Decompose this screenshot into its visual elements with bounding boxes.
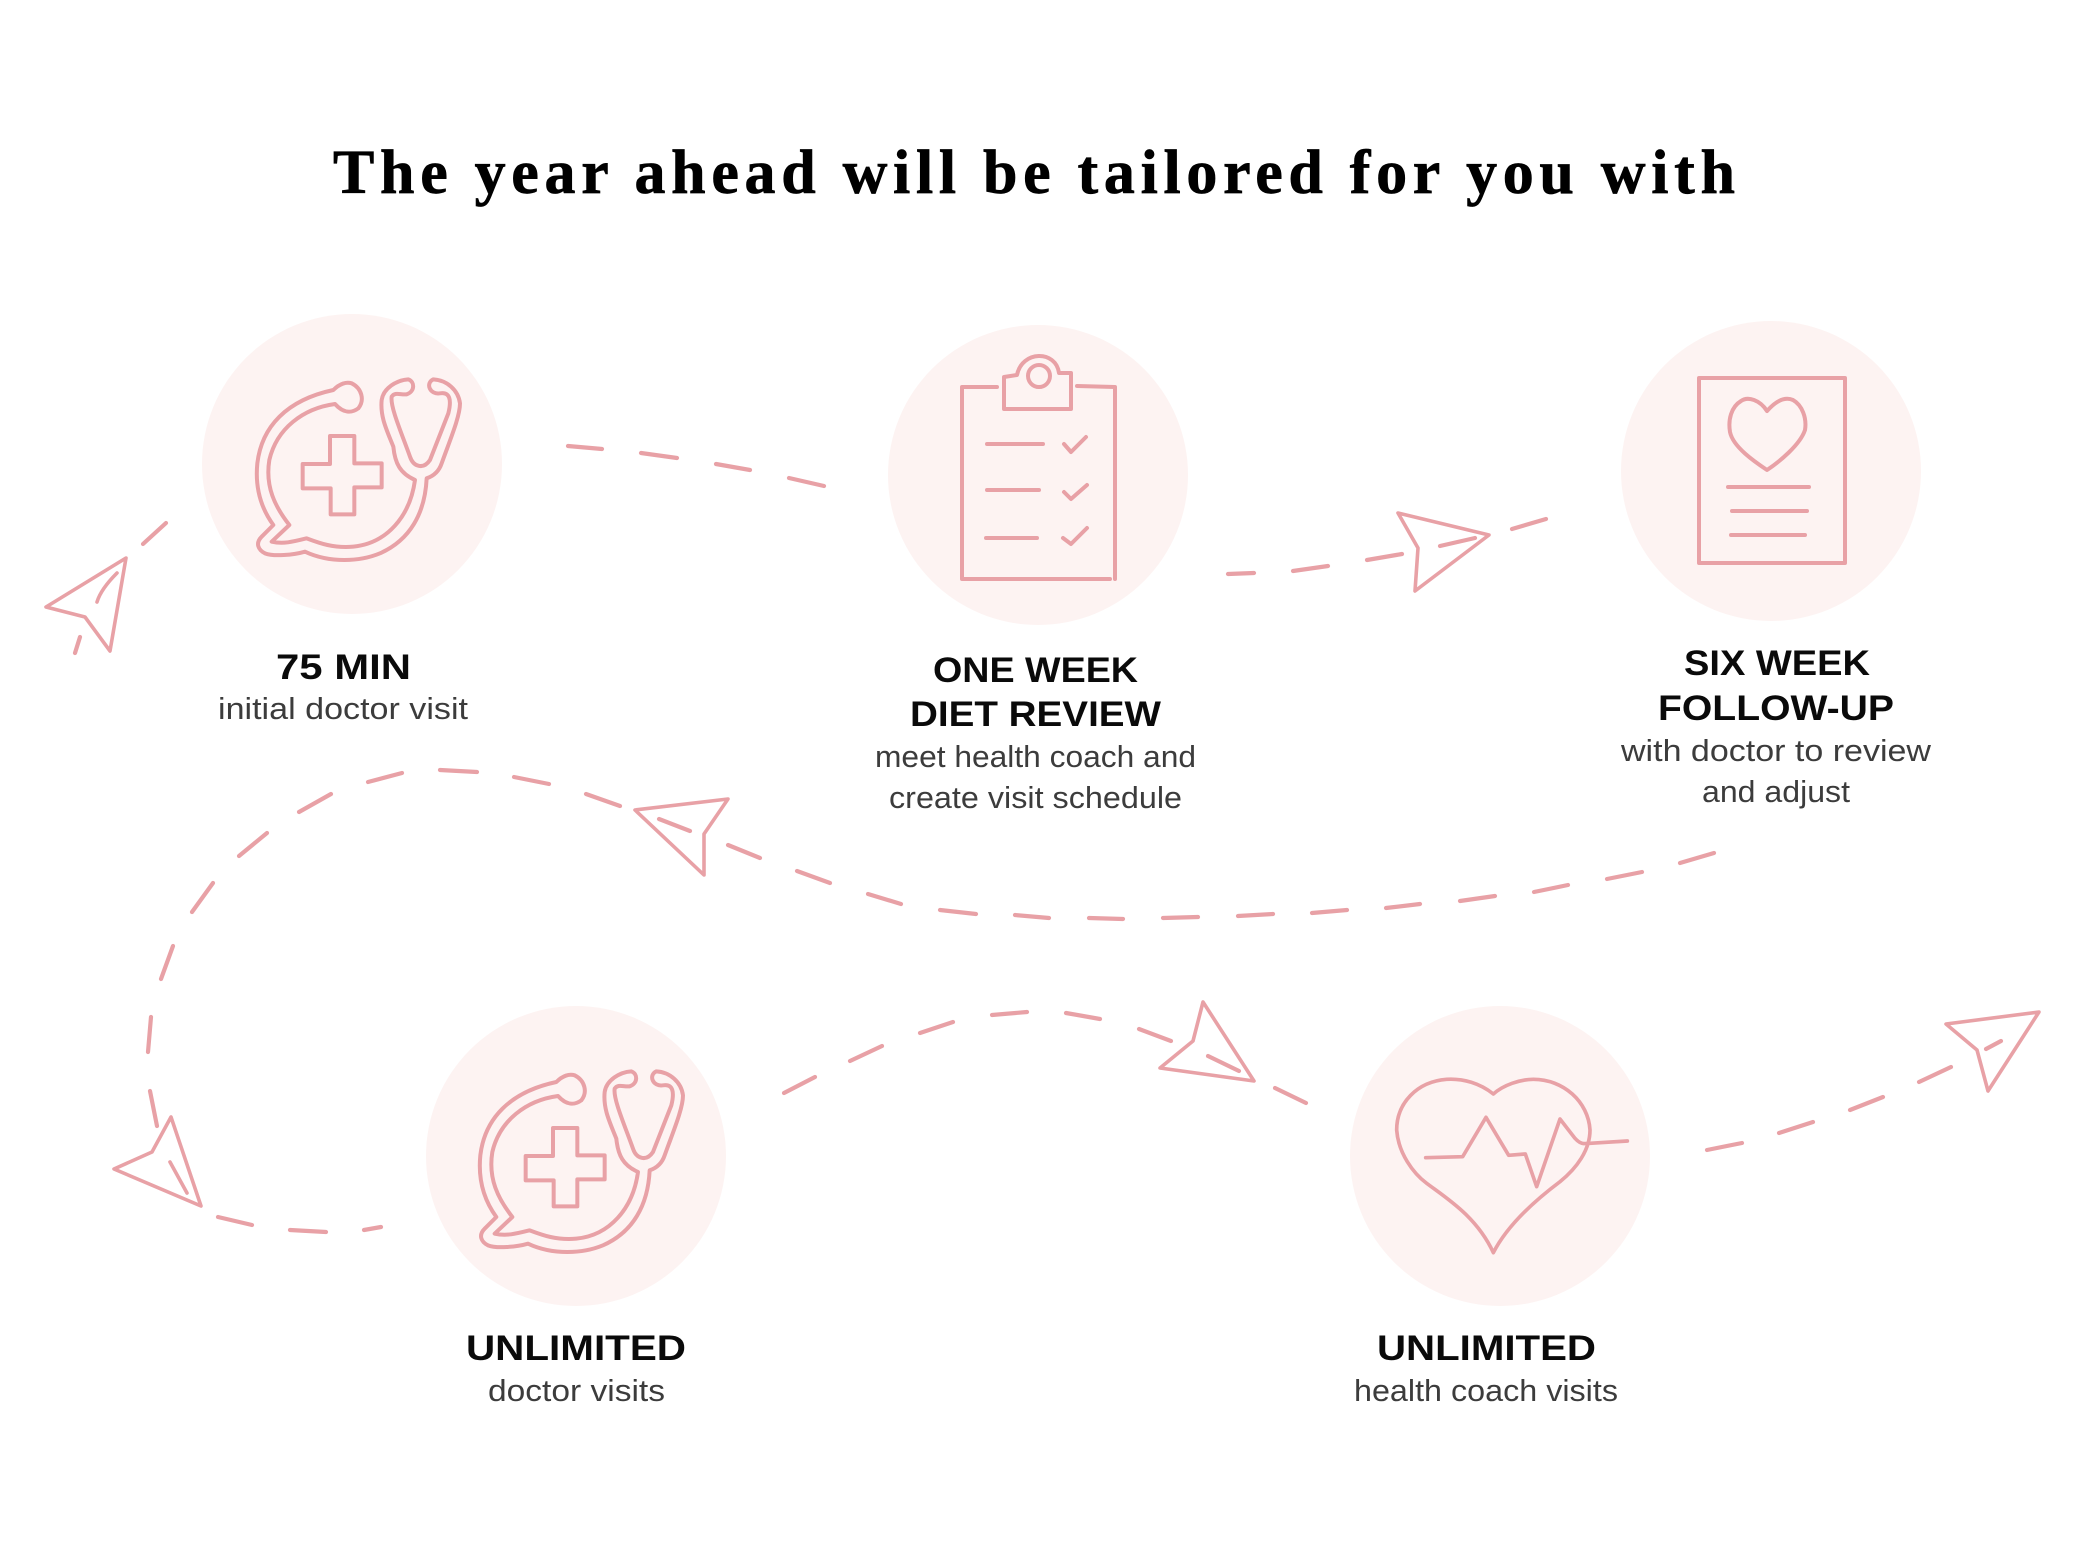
label heading line two: DIET REVIEW xyxy=(910,695,1161,734)
icon: stethoscope speech bubble xyxy=(480,1071,683,1252)
label heading: ONE WEEK xyxy=(933,651,1138,690)
background circle xyxy=(202,314,502,614)
arrow: final plane flying away from fifth circle xyxy=(1707,1012,2039,1150)
label description line two: and adjust xyxy=(1702,774,1850,809)
label description: initial doctor visit xyxy=(218,691,468,726)
panel: one week diet review xyxy=(875,325,1196,815)
panel: unlimited doctor visits xyxy=(426,1006,726,1408)
label description line two: create visit schedule xyxy=(889,780,1182,815)
arrow: long curve from third circle to fourth circle xyxy=(114,770,1714,1232)
icon: stethoscope speech bubble xyxy=(257,379,460,560)
label heading line two: FOLLOW-UP xyxy=(1658,689,1894,728)
label description: doctor visits xyxy=(488,1373,665,1408)
arrow: dashes from first circle to second circle xyxy=(568,446,824,486)
label heading: UNLIMITED xyxy=(1377,1329,1596,1368)
panel: six week follow-up xyxy=(1620,321,1932,809)
background circle xyxy=(1350,1006,1650,1306)
arrow: start plane flying from first circle xyxy=(46,523,166,653)
label heading: UNLIMITED xyxy=(466,1329,686,1368)
background circle xyxy=(888,325,1188,625)
panel: 75 min initial doctor visit xyxy=(202,314,502,726)
arrow: curve from fourth circle to fifth circle xyxy=(784,1002,1306,1103)
title: The year ahead will be tailored for you with xyxy=(333,139,1735,207)
label description: health coach visits xyxy=(1354,1373,1618,1408)
label heading: 75 MIN xyxy=(276,648,411,687)
icon: heart with pulse line xyxy=(1397,1079,1627,1253)
label description: with doctor to review xyxy=(1620,733,1932,768)
icon: clipboard checklist xyxy=(962,356,1115,579)
label description: meet health coach and xyxy=(875,739,1196,774)
icon: document with heart xyxy=(1699,378,1845,563)
background circle xyxy=(1621,321,1921,621)
background circle xyxy=(426,1006,726,1306)
arrow: dashes and plane from second circle to third circle xyxy=(1228,513,1546,591)
label heading: SIX WEEK xyxy=(1684,644,1870,683)
panel: unlimited health coach visits xyxy=(1350,1006,1650,1408)
